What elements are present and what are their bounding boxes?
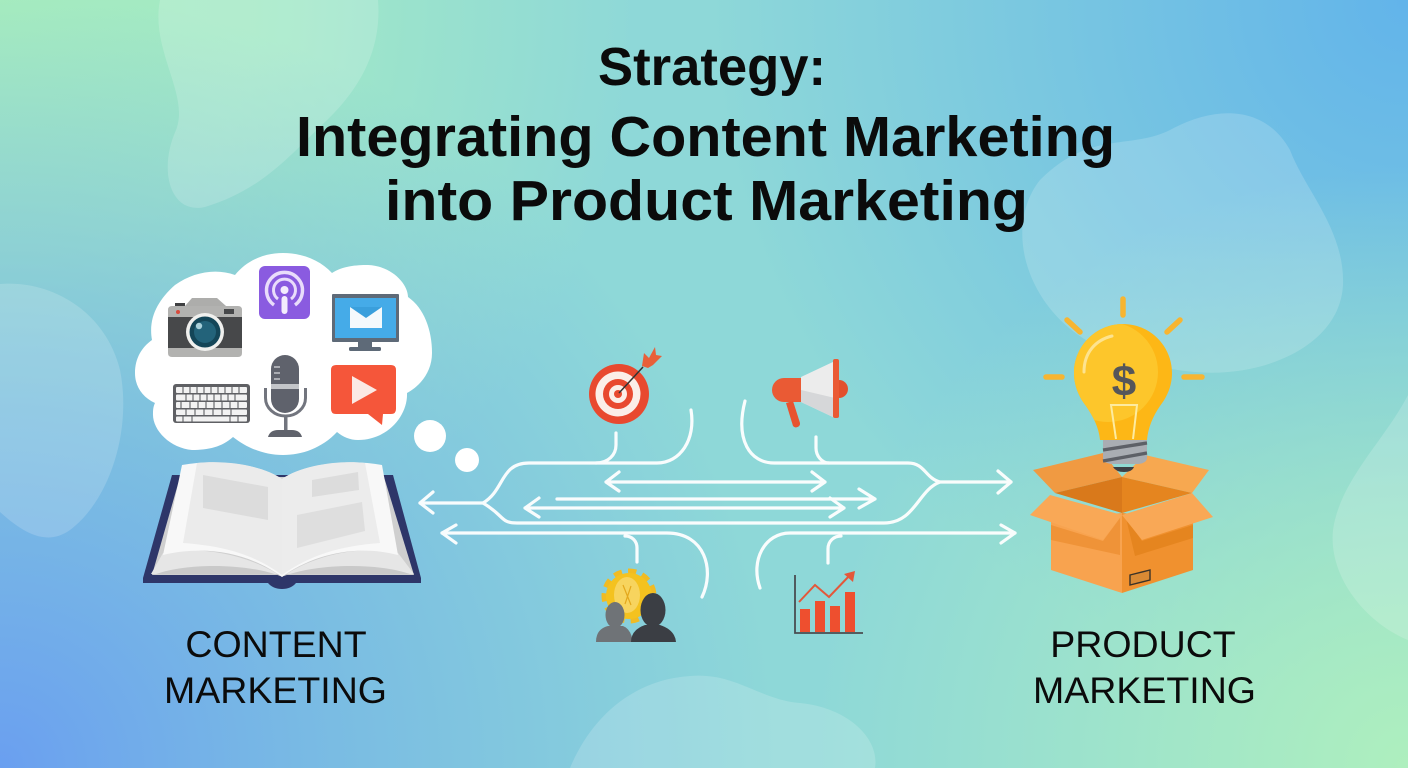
- diagram: interwoven arrows: [420, 401, 1015, 597]
- title: [296, 37, 1115, 233]
- label: product marketing: PRODUCT: [1050, 623, 1236, 665]
- icon: email monitor: [332, 294, 399, 351]
- arrow: bottom left to content: [442, 525, 707, 597]
- icon: podcast: [259, 266, 310, 319]
- arrow: bottom right to product: [757, 525, 1015, 588]
- icon: microphone: [266, 355, 306, 437]
- icon: open book: [143, 462, 421, 589]
- title: Integrating Content Marketing: [296, 105, 1115, 169]
- label: content marketing: MARKETING: [164, 669, 387, 711]
- title: into Product Marketing: [385, 169, 1028, 233]
- title: Strategy:: [598, 37, 826, 97]
- icon: target: [589, 347, 662, 424]
- icon: gear and people: [596, 572, 676, 642]
- arrow: right merge to product: [742, 401, 1011, 493]
- icon: growth chart: [795, 571, 863, 633]
- label: product marketing: [1033, 623, 1256, 711]
- label: content marketing: [164, 623, 387, 711]
- icon: megaphone: [772, 359, 848, 427]
- label: product marketing: MARKETING: [1033, 669, 1256, 711]
- icon: camera: [168, 298, 242, 357]
- box back flaps: [1033, 453, 1209, 513]
- icon: open box front: [1030, 493, 1213, 593]
- thought cloud: [135, 253, 479, 472]
- icon: light bulb: $: [1112, 357, 1136, 406]
- arrow: left merge to content: [420, 410, 940, 523]
- panel: content marketing: [135, 253, 479, 711]
- icon: light bulb: [1046, 299, 1202, 472]
- inner arrows: [525, 472, 875, 517]
- label: content marketing: CONTENT: [185, 623, 367, 665]
- panel: product marketing: [1030, 299, 1256, 711]
- icon: video play: [331, 365, 396, 425]
- icon: keyboard: [173, 384, 250, 423]
